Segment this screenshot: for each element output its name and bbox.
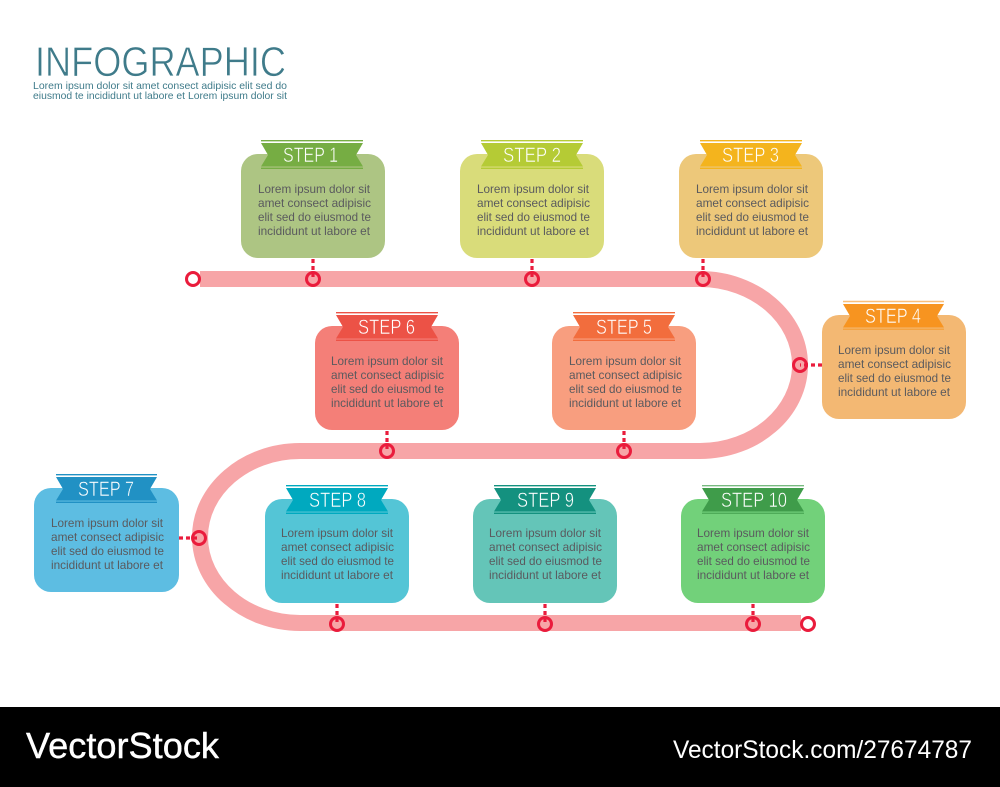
panel: step 2 [460,141,604,258]
panel: step 4 [822,302,966,419]
body text: step 7: Lorem ipsum dolor sit [51,516,164,530]
body text: step 6: amet consect adipisic [331,368,444,382]
body text: step 4: Lorem ipsum dolor sit [838,343,951,357]
ribbon: step 5: STEP 5 [596,316,652,339]
connectors and markers [179,259,822,630]
body text: step 7: elit sed do eiusmod te [51,544,164,558]
panel: step 3 [679,141,823,258]
body text: step 3: amet consect adipisic [696,196,809,210]
body text: step 4: amet consect adipisic [838,357,951,371]
body text: step 10: amet consect adipisic [697,540,810,554]
ribbon: step 10 [702,486,804,513]
panel: step 7 [34,475,179,592]
panel: step 5 [552,313,696,430]
body text: step 7: amet consect adipisic [51,530,164,544]
body text: step 1: incididunt ut labore et [258,224,371,238]
body text: step 3 [696,182,809,238]
subtitle text [33,80,287,102]
ribbon: step 4 [843,302,944,329]
body text: step 3: incididunt ut labore et [696,224,809,238]
body text: step 4: elit sed do eiusmod te [838,371,951,385]
ribbon: step 1: STEP 1 [283,144,338,167]
body text: step 9: amet consect adipisic [489,540,602,554]
footer bar [0,707,1000,787]
ribbon: step 8 [286,486,388,513]
title: INFOGRAPHIC [35,38,286,85]
ribbon: step 7: STEP 7 [78,478,134,501]
panel: step 10 [681,486,825,603]
ribbon: step 10: STEP 10 [721,489,787,512]
body text: step 10: elit sed do eiusmod te [697,554,810,568]
footer logo: VectorStock [26,725,220,766]
ribbon: step 5 [573,313,675,340]
ribbon: step 1 [261,141,363,168]
body text: step 4 [838,343,951,399]
ribbon: step 4: STEP 4 [865,305,921,328]
body text: step 7 [51,516,164,572]
body text: step 5 [569,354,682,410]
ribbon: step 2 [481,141,583,168]
body text: step 5: Lorem ipsum dolor sit [569,354,682,368]
body text: step 1: amet consect adipisic [258,196,371,210]
panel: step 6 [315,313,459,430]
body text: step 2: elit sed do eiusmod te [477,210,590,224]
ribbon: step 9 [494,486,596,513]
ribbon: step 3 [700,141,802,168]
body text: step 4: incididunt ut labore et [838,385,951,399]
body text: step 5: amet consect adipisic [569,368,682,382]
ribbon: step 9: STEP 9 [517,489,574,512]
panel: step 1 [241,141,385,258]
body text: step 2 [477,182,590,238]
body text: step 10: Lorem ipsum dolor sit [697,526,810,540]
ribbon: step 2: STEP 2 [503,144,561,167]
body text: step 8: incididunt ut labore et [281,568,394,582]
body text: step 9 [489,526,602,582]
body text: step 10: incididunt ut labore et [697,568,810,582]
body text: step 5: elit sed do eiusmod te [569,382,682,396]
body text: step 7: incididunt ut labore et [51,558,164,572]
ribbon: step 8: STEP 8 [309,489,366,512]
body text: step 8: elit sed do eiusmod te [281,554,394,568]
panel: step 9 [473,486,617,603]
body text: step 2: Lorem ipsum dolor sit [477,182,590,196]
body text: step 6: elit sed do eiusmod te [331,382,444,396]
subtitle text: Lorem ipsum dolor sit amet consect adipisic elit sed do [33,80,287,92]
body text: step 3: Lorem ipsum dolor sit [696,182,809,196]
body text: step 8: Lorem ipsum dolor sit [281,526,394,540]
body text: step 2: incididunt ut labore et [477,224,590,238]
body text: step 3: elit sed do eiusmod te [696,210,809,224]
body text: step 1 [258,182,371,238]
body text: step 6: incididunt ut labore et [331,396,444,410]
subtitle text: eiusmod te incididunt ut labore et Lorem ipsum dolor sit [33,90,287,102]
body text: step 1: Lorem ipsum dolor sit [258,182,371,196]
body text: step 1: elit sed do eiusmod te [258,210,371,224]
serpentine track [200,279,801,623]
footer url: VectorStock.com/27674787 [673,736,972,764]
ribbon: step 6 [336,313,438,340]
body text: step 9: Lorem ipsum dolor sit [489,526,602,540]
body text: step 2: amet consect adipisic [477,196,590,210]
body text: step 5: incididunt ut labore et [569,396,682,410]
panel: step 8 [265,486,409,603]
ribbon: step 6: STEP 6 [358,316,415,339]
body text: step 9: elit sed do eiusmod te [489,554,602,568]
body text: step 9: incididunt ut labore et [489,568,602,582]
ribbon: step 7 [56,475,157,502]
body text: step 8 [281,526,394,582]
body text: step 6: Lorem ipsum dolor sit [331,354,444,368]
body text: step 8: amet consect adipisic [281,540,394,554]
body text: step 10 [697,526,810,582]
ribbon: step 3: STEP 3 [722,144,779,167]
body text: step 6 [331,354,444,410]
